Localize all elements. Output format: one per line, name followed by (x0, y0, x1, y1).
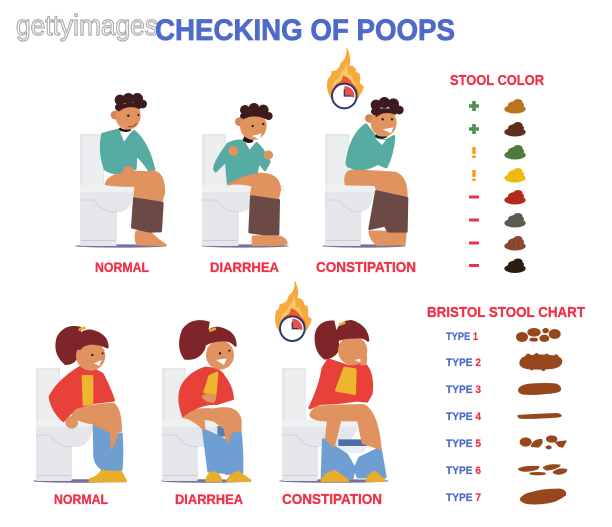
girl normal figure (33, 326, 127, 483)
type 5 label: TYPE 5 (446, 438, 481, 450)
poop icon streaked (504, 236, 526, 250)
boy normal figure (75, 93, 167, 248)
boy constipation figure (322, 97, 407, 248)
sign minus 1 (469, 196, 479, 198)
poop icon red (504, 190, 526, 204)
poop icon grey (504, 213, 526, 228)
icon: burning clock boy (327, 48, 363, 108)
stool shapes (517, 329, 567, 504)
label: normal girl: NORMAL (54, 491, 108, 507)
type 2 stool (520, 354, 562, 370)
type 7 stool (520, 489, 566, 504)
type 3 label: TYPE 3 (446, 384, 481, 396)
girl diarrhea figure (161, 321, 251, 483)
sign minus 3 (469, 242, 479, 244)
icon: burning clock girl (275, 282, 311, 341)
sign minus 2 (469, 218, 479, 222)
type 5 stool (520, 436, 566, 449)
type 6 label: TYPE 6 (446, 465, 481, 477)
boy diarrhea figure (201, 103, 289, 248)
type 6 stool (519, 465, 567, 475)
poop icon brown (504, 122, 526, 136)
sign warning 2 (472, 170, 476, 181)
type 2 label: TYPE 2 (446, 357, 481, 369)
sign warning 1 (472, 147, 476, 158)
type 1 stool (517, 329, 560, 341)
stool color heading: STOOL COLOR (450, 72, 544, 89)
type 3 stool (519, 384, 560, 394)
type 4 stool (518, 414, 561, 418)
label: normal boy: NORMAL (95, 259, 149, 275)
label: diarrhea girl: DIARRHEA (175, 491, 243, 507)
type 1 label: TYPE 1 (446, 331, 478, 343)
watermark: gettyimages (16, 10, 158, 42)
label: constipation boy: CONSTIPATION (316, 259, 416, 276)
poop icon ochre (504, 99, 526, 114)
sign plus 1 (469, 101, 479, 111)
bristol heading: BRISTOL STOOL CHART (427, 304, 585, 321)
title: CHECKING OF POOPS (155, 14, 455, 47)
girl constipation figure (279, 321, 389, 483)
panel: bristol stool chart (427, 304, 585, 504)
label: diarrhea boy: DIARRHEA (210, 259, 279, 275)
sign minus 4 (469, 264, 479, 267)
poop icon black (504, 258, 526, 273)
label: constipation girl: CONSTIPATION (282, 491, 382, 508)
sign plus 2 (469, 124, 479, 134)
panel: stool color (450, 72, 544, 273)
type 7 label: TYPE 7 (446, 492, 481, 504)
type 4 label: TYPE 4 (446, 411, 482, 423)
poop icon green (504, 145, 526, 160)
poop icon yellow (504, 168, 526, 182)
